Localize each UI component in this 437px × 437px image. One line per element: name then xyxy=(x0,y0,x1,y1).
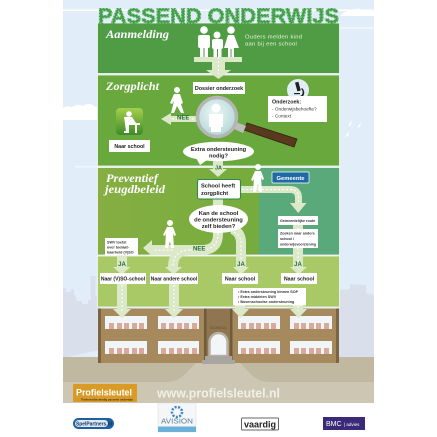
label: gemeentelijke route xyxy=(278,216,318,225)
clouds and birds xyxy=(63,9,374,167)
heading: zorgplicht: Zorgplicht xyxy=(105,79,160,93)
label: naar school midden: Naar school xyxy=(225,276,256,282)
panel: zorgplicht xyxy=(98,75,340,166)
panel: preventief jeugdbeleid xyxy=(98,168,340,255)
heading: aanmelding: Aanmelding xyxy=(105,27,169,41)
label: ja school: JA xyxy=(237,262,246,268)
poster background: sky xyxy=(63,0,374,358)
logo: spelpartners: SpelPartners.nl xyxy=(76,422,113,428)
logo: bmc advies xyxy=(323,417,365,430)
label: zoeken naar andere school: Zoeken naar andere xyxy=(280,232,315,236)
label: zoeken naar andere school: school / xyxy=(280,237,294,241)
school door xyxy=(210,333,228,356)
icon: magnifying glass xyxy=(198,98,297,147)
label: zoeken naar andere school: onderwijsvoorziening xyxy=(280,242,316,246)
label: ja gemeente: JA xyxy=(294,262,303,268)
box: school heeft zorgplicht xyxy=(198,180,240,199)
label: swv toetst xyxy=(105,238,138,256)
skyline xyxy=(63,276,374,358)
arrow: ja to naar school xyxy=(232,229,249,274)
poster background: ground xyxy=(63,357,374,403)
school label: SCHOOL xyxy=(210,325,228,330)
arrow: nee to naar school xyxy=(161,113,199,125)
routes and arrows xyxy=(113,57,307,318)
bubble: kan de school: zelf bieden? xyxy=(202,224,236,230)
heading: preventief jeugdbeleid: Preventief xyxy=(106,171,159,185)
logo: profielsleutel: Toekomstbestendig passend onderwijs xyxy=(81,398,134,402)
steps xyxy=(202,356,235,364)
callout: onderzoek: - Onderwijsbehoefte? xyxy=(272,106,317,112)
label: naar school: Naar school xyxy=(114,144,145,150)
callout: onderzoek xyxy=(268,96,327,122)
arrow: route gemeente to naar school xyxy=(290,225,307,274)
label: gemeente: Gemeente xyxy=(276,176,305,182)
label: naar vso school xyxy=(100,273,146,284)
title: PASSEND ONDERWIJS xyxy=(98,5,339,28)
icon: walking figure gemeente xyxy=(251,164,264,192)
logo: vaardig: vaardig xyxy=(244,420,276,430)
bubble: kan de school: Kan de school xyxy=(199,211,239,217)
icon: parents and child xyxy=(198,26,239,58)
logo: profielsleutel: Profielsleutel xyxy=(76,388,132,398)
arrow: nee to naar andere school xyxy=(165,250,190,274)
label: dossier onderzoek xyxy=(193,82,245,94)
callout: onderzoek: - Context xyxy=(272,114,292,118)
arrow: aanmelding to zorgplicht xyxy=(194,57,242,79)
label: dossier onderzoek: Dossier onderzoek xyxy=(195,86,243,92)
label: ja vso: JA xyxy=(118,262,127,268)
website url: www.profielsleutel.nl xyxy=(156,386,280,400)
arrow: ja to school heeft zorgplicht xyxy=(209,160,227,177)
arrow: school to bubble road xyxy=(213,199,223,207)
icon: walking figure nee xyxy=(163,220,176,248)
logo: avision xyxy=(158,403,196,432)
label: ja top: JA xyxy=(215,166,222,172)
label: nee: NEE xyxy=(177,116,189,122)
callout: extra ondersteuning: • Extra middelen SWV xyxy=(238,295,277,299)
callout: extra ondersteuning xyxy=(233,288,306,306)
label: gemeente xyxy=(272,172,309,183)
label: gemeentelijke route: Gemeentelijke route xyxy=(280,219,315,223)
arrow: gemeente route xyxy=(240,190,306,213)
pupils in windows xyxy=(109,323,329,354)
panel: uitkomsten xyxy=(98,256,340,307)
bubble: extra ondersteuning nodig xyxy=(183,142,254,165)
logo: spelpartners xyxy=(73,418,114,429)
callout: extra ondersteuning: • Bovenschoolse ondersteuning xyxy=(238,300,294,304)
label: zoeken naar andere school xyxy=(278,229,318,248)
text: ouders melden kind: Ouders melden kind xyxy=(245,34,302,40)
icon: walking figure zorgplicht xyxy=(170,87,184,113)
label: nee lower: NEE xyxy=(193,246,205,252)
bubble: extra ondersteuning nodig: Extra ondersteuning xyxy=(191,147,247,153)
label: swv toetst: baarheid (V)SO xyxy=(107,250,134,254)
label: naar vso school: Naar (V)SO-school xyxy=(101,276,146,282)
arrow: ja to naar vso school xyxy=(113,255,130,274)
label: naar school rechts xyxy=(281,273,317,284)
label: naar school midden xyxy=(222,273,258,284)
label: naar andere school xyxy=(150,273,198,284)
arrow: nee to swv xyxy=(143,228,218,256)
label: naar school xyxy=(109,140,150,152)
bubble: kan de school xyxy=(189,205,248,233)
title: PASSEND ONDERWIJS xyxy=(98,5,339,28)
callout: onderzoek: Onderzoek: xyxy=(272,100,301,106)
box: school heeft zorgplicht: School heeft xyxy=(201,184,235,190)
label: naar andere school: Naar andere school xyxy=(151,276,198,282)
logo: profielsleutel xyxy=(73,384,137,402)
school building xyxy=(98,308,339,364)
panel: preventief jeugdbeleid: jeugdbeleid xyxy=(103,182,166,196)
panel: aanmelding: aan bij een school xyxy=(245,42,297,48)
bubble: kan de school: de ondersteuning xyxy=(194,218,243,224)
icon: microscope xyxy=(287,79,309,101)
logo: avision: AVISION xyxy=(161,418,193,426)
callout: extra ondersteuning: • Extra ondersteuning binnen SOP xyxy=(238,290,299,294)
label: swv toetst: SWV toetst xyxy=(107,240,127,244)
icon: pupil at desk xyxy=(116,108,143,135)
label: swv toetst: over toelaat- xyxy=(107,246,130,250)
logo: bmc advies: BMC xyxy=(326,421,342,428)
lower arrows to school xyxy=(113,284,307,318)
box: school heeft zorgplicht: zorgplicht xyxy=(201,191,228,197)
bubble: extra ondersteuning nodig: nodig? xyxy=(209,154,229,160)
logo: bmc advies: | advies xyxy=(344,422,360,427)
panel: aanmelding xyxy=(98,23,340,74)
label: naar school rechts: Naar school xyxy=(284,276,315,282)
